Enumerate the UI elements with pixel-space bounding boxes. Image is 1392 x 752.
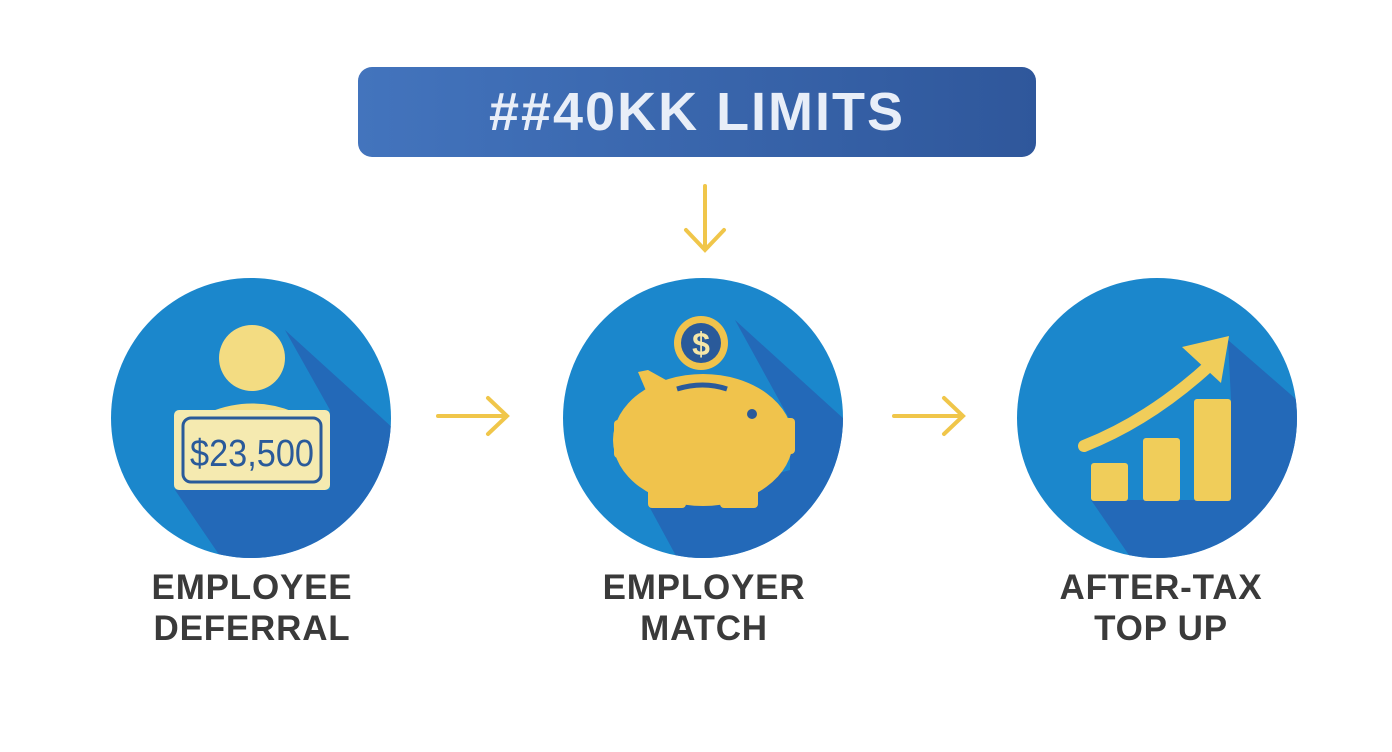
title banner: ##40KK LIMITS — [489, 82, 905, 142]
label: employer match: EMPLOYER — [603, 568, 805, 607]
arrow: right 1 — [438, 398, 507, 434]
icon: after-tax growth chart — [1017, 278, 1297, 558]
icon: employee deferral — [111, 278, 391, 558]
label: after-tax top up: TOP UP — [1094, 609, 1228, 648]
label: after-tax top up: AFTER-TAX — [1060, 568, 1262, 607]
label: after-tax top up — [1060, 568, 1262, 648]
label: employer match — [603, 568, 805, 648]
title banner — [358, 67, 1036, 157]
icon: employee deferral: $23,500 — [190, 433, 314, 475]
diagram graphics — [111, 184, 1297, 558]
arrow: down — [686, 186, 724, 250]
label: employee deferral — [152, 568, 352, 648]
label: employee deferral: EMPLOYEE — [152, 568, 352, 607]
icon: employer match piggy bank — [563, 278, 843, 558]
icon: employer match piggy bank: $ — [692, 326, 710, 362]
label: employee deferral: DEFERRAL — [154, 609, 350, 648]
arrow: right 2 — [894, 398, 963, 434]
label: employer match: MATCH — [640, 609, 768, 648]
